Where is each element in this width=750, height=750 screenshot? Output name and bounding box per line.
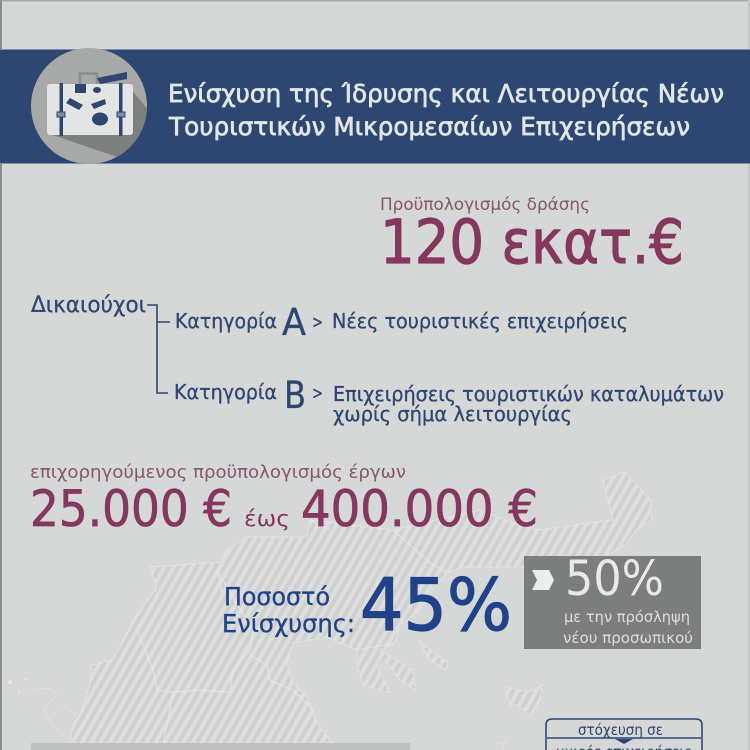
subsidised budget range: επιχορηγούμενος προϋπολογισμός έργων	[30, 462, 406, 483]
category B: Β	[284, 374, 306, 417]
subsidised budget range: 25.000 €	[30, 480, 232, 538]
category A	[175, 301, 628, 344]
title banner	[0, 48, 750, 164]
beneficiaries tree: Δικαιούχοι	[31, 293, 146, 318]
banner title text: Ενίσχυση της Ίδρυσης και Λειτουργίας Νέων	[168, 79, 724, 108]
aid percentage: 45%	[360, 563, 512, 647]
category B: Επιχειρήσεις τουριστικών καταλυμάτων	[333, 382, 724, 406]
category B	[174, 374, 724, 426]
category B: χωρίς σήμα λειτουργίας	[333, 402, 572, 426]
category A: >	[312, 312, 323, 333]
banner title text: Τουριστικών Μικρομεσαίων Επιχειρήσεων	[168, 112, 690, 141]
category B: Κατηγορία	[174, 380, 277, 404]
targeting box	[546, 719, 702, 750]
map of Greece background	[8, 472, 652, 750]
icon: pointer	[615, 739, 633, 744]
callout: 50 percent	[524, 551, 701, 649]
bottom grey panel	[31, 743, 410, 750]
category A: Α	[282, 301, 306, 344]
category A: Κατηγορία	[175, 309, 277, 333]
aid percentage	[222, 563, 512, 647]
icon: suitcase in circle	[31, 48, 147, 164]
banner title text	[168, 79, 724, 141]
targeting box: στόχευση σε	[578, 721, 663, 739]
callout: 50 percent: με την πρόσληψη	[564, 608, 690, 626]
subsidised budget range	[30, 462, 538, 538]
subsidised budget range: 400.000 €	[301, 480, 538, 538]
budget block: Προϋπολογισμός δράσης	[380, 195, 590, 215]
category B: >	[312, 383, 323, 404]
budget block: 120 εκατ.€	[380, 207, 684, 278]
beneficiaries tree	[31, 293, 724, 426]
aid percentage: Ποσοστό	[224, 582, 330, 611]
subsidised budget range: έως	[244, 507, 290, 532]
callout: 50 percent: νέου προσωπικού	[563, 629, 693, 647]
callout: 50 percent: 50%	[565, 551, 664, 607]
category A: Νέες τουριστικές επιχειρήσεις	[332, 309, 628, 333]
icon: arrow	[532, 570, 554, 590]
aid percentage: Ενίσχυσης:	[222, 609, 355, 638]
